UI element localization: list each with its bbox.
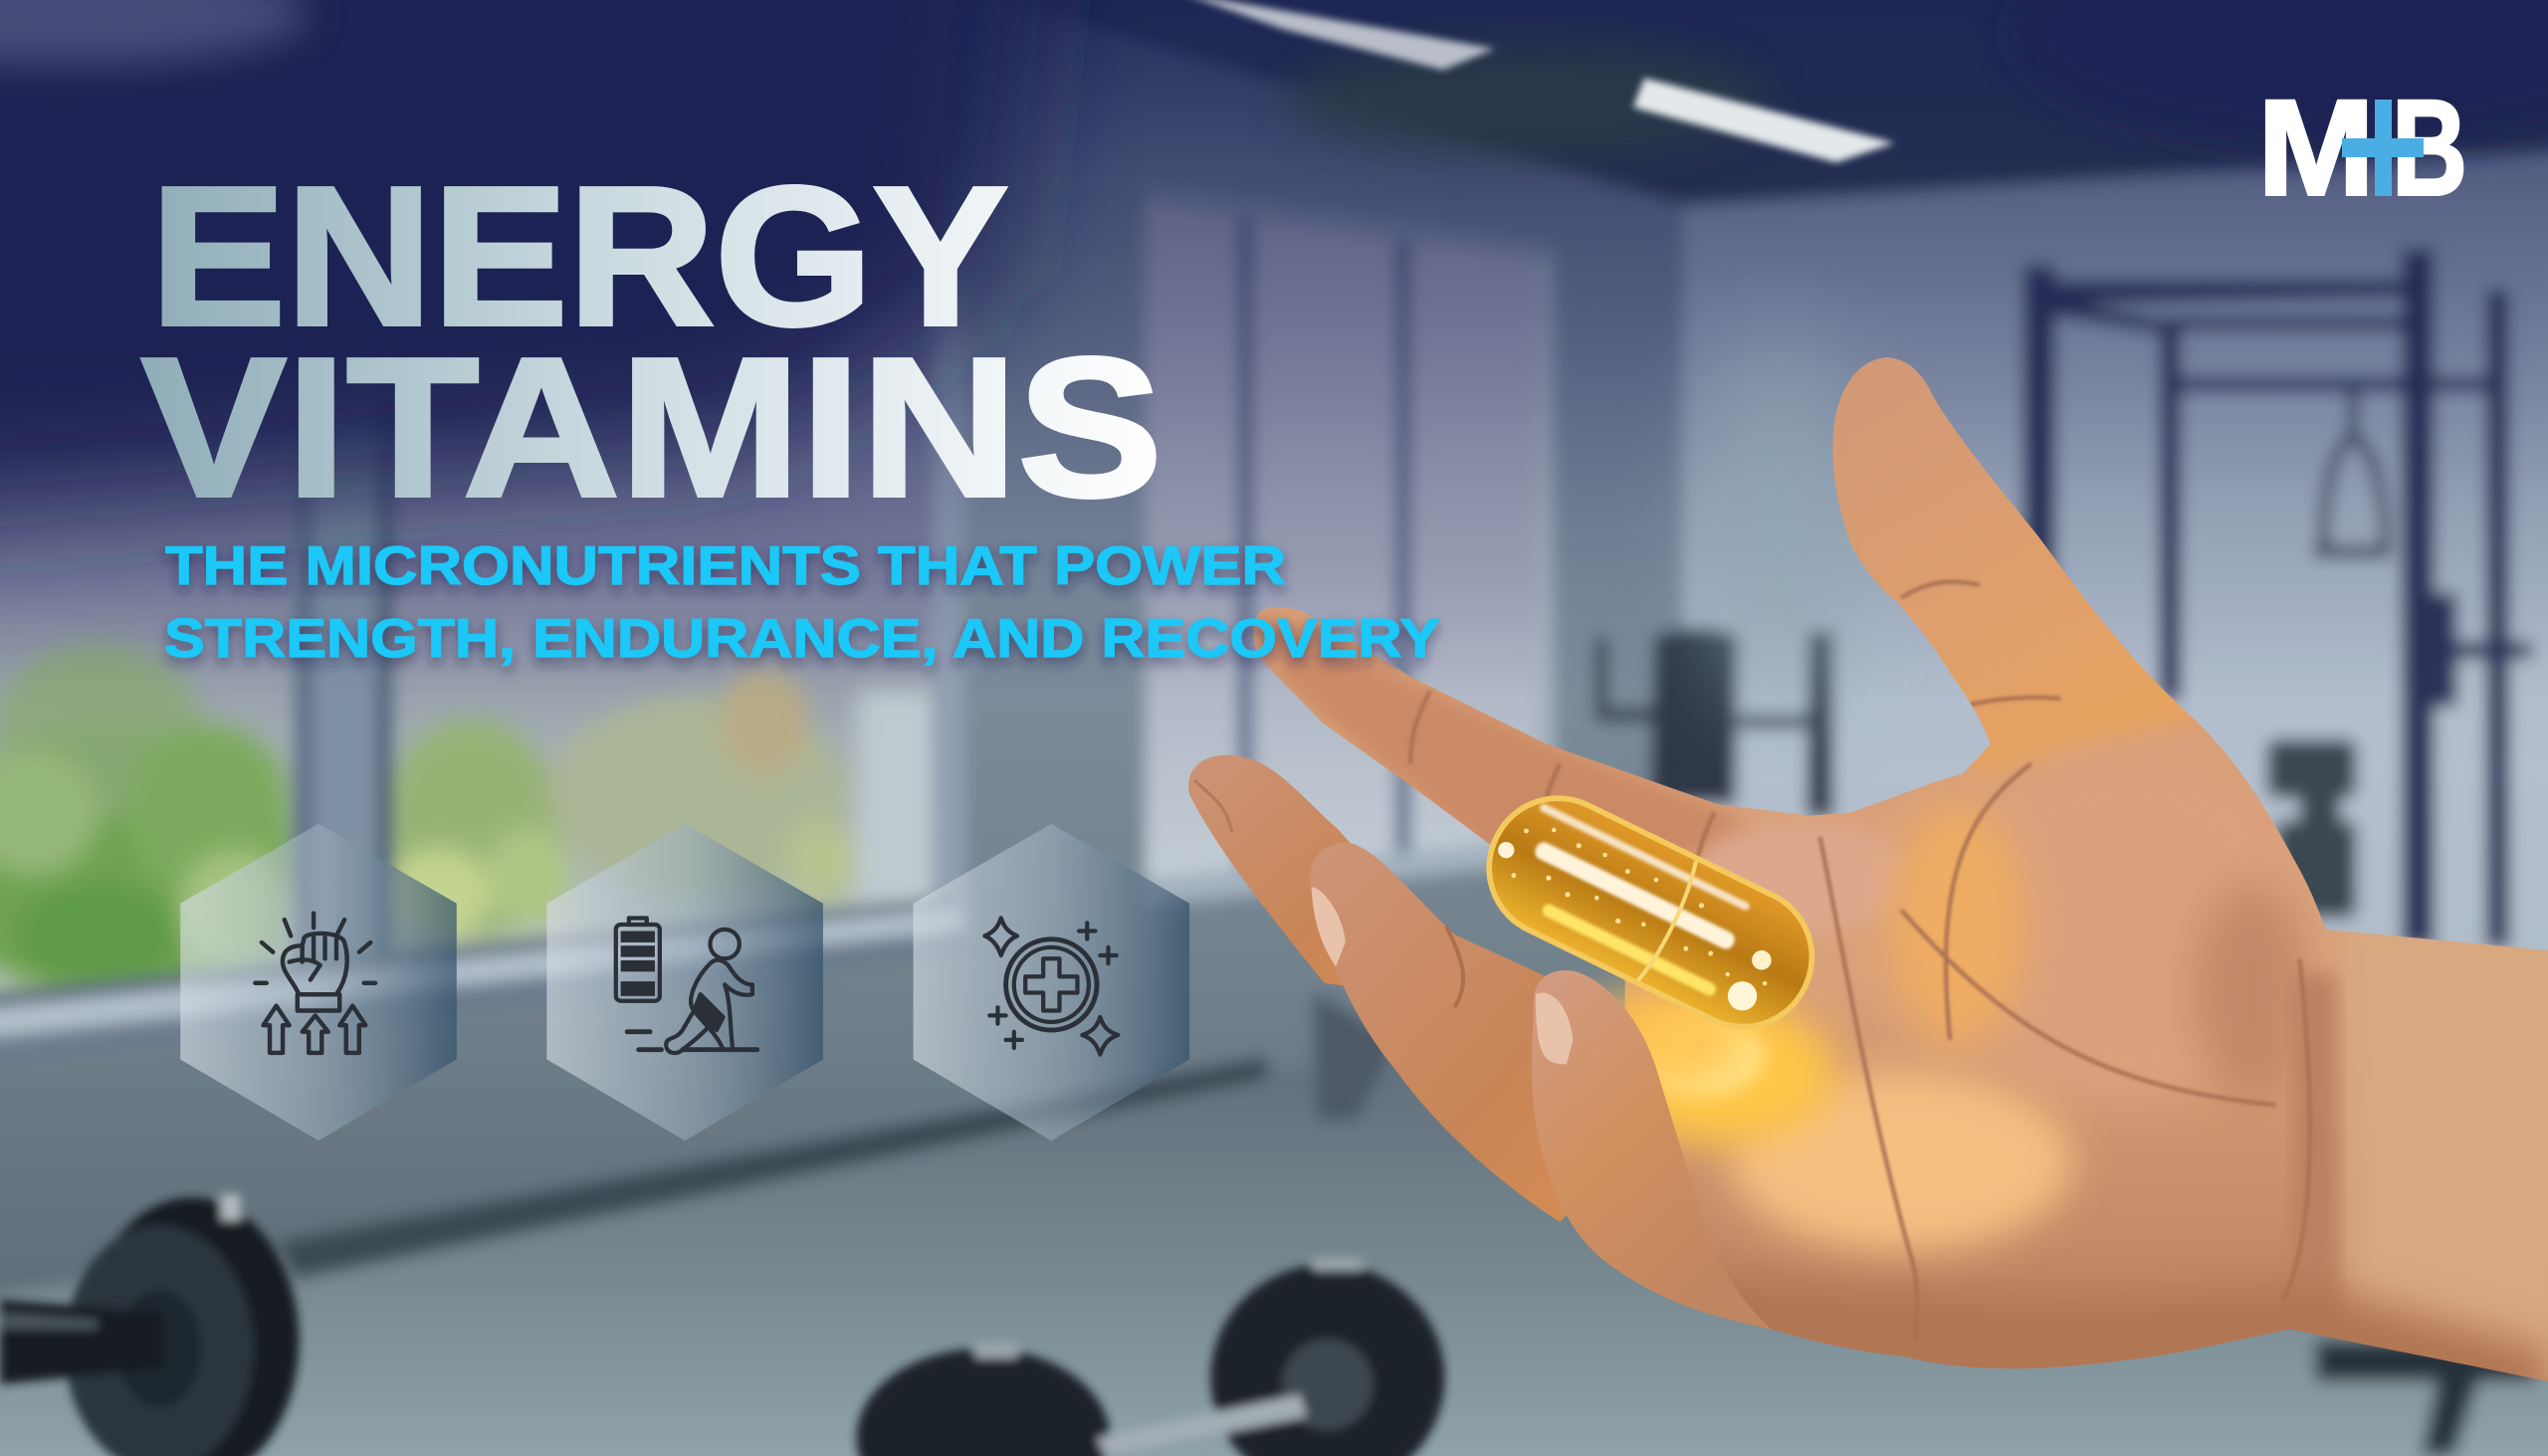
capsule lower highlight [1540, 902, 1718, 998]
barbell centre [856, 1258, 1444, 1456]
palm creases [1410, 582, 2310, 1341]
rack seat [2267, 739, 2356, 918]
dark navy overlay behind title [0, 0, 2548, 715]
floor [0, 1040, 2548, 1456]
logo: B [2392, 72, 2467, 225]
right wall [1683, 138, 2548, 1397]
icon: fist with up arrows [255, 914, 375, 1053]
subtitle [164, 534, 1440, 669]
ceiling [896, 0, 2548, 206]
machine behind hand [1313, 991, 1397, 1122]
thenar mound [2050, 797, 2319, 1089]
logo [2257, 72, 2467, 225]
baseboard [277, 1056, 1267, 1281]
thumb shading [1820, 341, 2210, 780]
subtitle: THE MICRONUTRIENTS THAT POWER [165, 534, 1286, 596]
hexagon badge: recovery [914, 824, 1189, 1141]
logo: M [2257, 72, 2375, 225]
far finger [1188, 755, 1446, 991]
wrist [2339, 932, 2548, 1381]
palm pink area near capsule [1690, 820, 1918, 935]
capsule main highlight [1533, 840, 1738, 951]
left window glass [0, 0, 958, 1024]
capsule glow on palm [1569, 991, 1747, 1089]
teal ceiling tone [1284, 42, 1772, 159]
teal glow on right wall [1706, 325, 1852, 715]
capsule bubbles [1480, 809, 1788, 1016]
power rack [2023, 249, 2532, 947]
ceiling light two [1633, 78, 1895, 162]
trees behind left window [0, 642, 936, 999]
bench bottom right [2316, 1341, 2535, 1456]
icon: battery and runner [616, 918, 757, 1053]
lower palm shadow [1624, 1270, 2548, 1381]
ceiling light one [1178, 0, 1495, 70]
ring finger [1310, 843, 1641, 1222]
right window [1146, 188, 1552, 886]
barbell left [0, 1194, 299, 1456]
left wall [0, 0, 1690, 1349]
hexagon badge: strength [180, 824, 457, 1141]
hand holding capsule [1188, 325, 2548, 1413]
title: ENERGY [150, 146, 1008, 367]
title: VITAMINS [141, 317, 1163, 538]
cable handle [2324, 390, 2386, 552]
subtitle: STRENGTH, ENDURANCE, AND RECOVERY [164, 607, 1440, 669]
capsule seam [1637, 861, 1703, 984]
icon: medical cross with sparkles [984, 918, 1118, 1055]
gel capsule [1466, 775, 1835, 1050]
title [141, 146, 1163, 538]
window sill [0, 897, 962, 1027]
pinky finger [1532, 970, 1772, 1330]
palm glow [1731, 1073, 2072, 1251]
palm thumb index and wrist [1235, 325, 2548, 1413]
capsule top highlight [1539, 802, 1751, 912]
index finger shading [1262, 616, 1742, 854]
window mullion [293, 0, 393, 975]
hexagon badge: endurance [546, 824, 823, 1141]
bench dark chair [1595, 627, 1833, 817]
